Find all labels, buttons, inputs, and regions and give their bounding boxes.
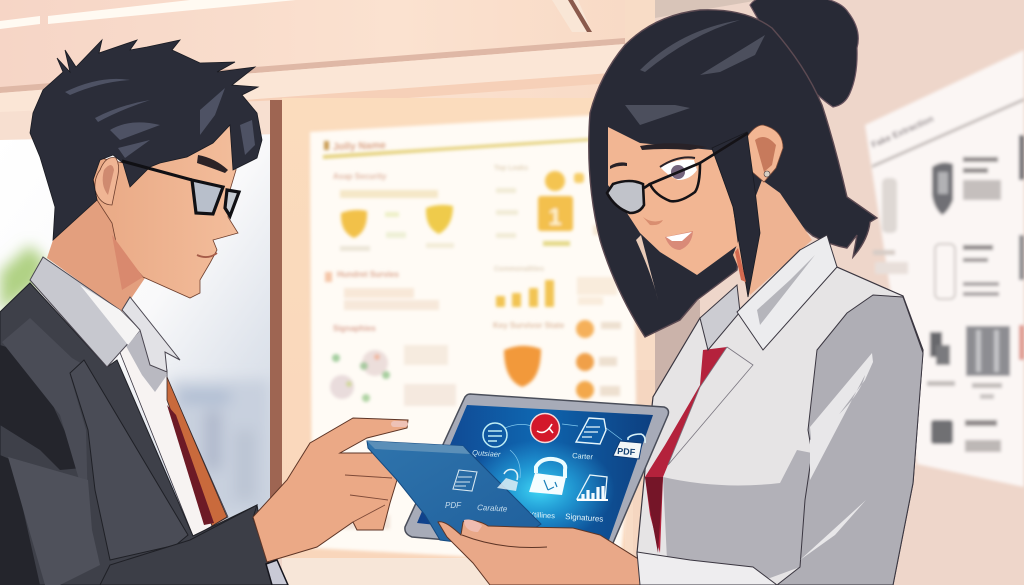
collar light bbox=[80, 285, 140, 345]
tablet bbox=[367, 394, 668, 553]
man ear bbox=[95, 158, 119, 205]
woman eyes bbox=[660, 160, 697, 180]
suit pocket fold bbox=[8, 457, 100, 585]
man hair bbox=[30, 40, 262, 240]
icon: small padlock bbox=[497, 470, 518, 491]
leaf top edge bbox=[367, 441, 470, 454]
collar shade bbox=[757, 255, 815, 325]
woman mouth bbox=[665, 231, 693, 250]
poster left column bbox=[325, 172, 456, 529]
woman nose bbox=[643, 217, 663, 225]
poster left column: Asap Security bbox=[333, 172, 387, 181]
woman blouse bbox=[637, 250, 923, 585]
woman glasses bbox=[607, 133, 748, 213]
icon: padlock badge bbox=[613, 434, 645, 459]
neck shadow bbox=[112, 235, 143, 290]
poster left column: Hundret Survies bbox=[337, 270, 399, 279]
woman teeth bbox=[666, 232, 692, 241]
tablet front leaf bbox=[367, 441, 541, 548]
hair sheen bbox=[65, 79, 255, 158]
man fingernail bbox=[391, 421, 408, 427]
man bbox=[0, 40, 408, 585]
hair light strand bbox=[636, 235, 658, 300]
screen glow bbox=[465, 440, 615, 540]
poster heading bbox=[323, 138, 590, 159]
poster heading: Jolly Name bbox=[333, 140, 386, 153]
window with blurred city view bbox=[0, 100, 282, 520]
tie shade bbox=[645, 477, 663, 553]
poster title: Fake Extraction bbox=[870, 113, 935, 150]
label: Ytillines: Ytillines bbox=[529, 510, 555, 520]
poster right column: 1 bbox=[548, 204, 562, 231]
poster right column: Key Survivor State bbox=[493, 321, 565, 330]
man inner ear bbox=[103, 165, 114, 195]
label: PDF: PDF bbox=[445, 501, 462, 510]
suit lapel bbox=[2, 318, 88, 510]
poster right column: Commonalities bbox=[494, 266, 544, 273]
woman bbox=[607, 20, 923, 585]
man tie shade bbox=[167, 405, 214, 525]
blouse sleeve bbox=[777, 295, 923, 585]
icon: document bbox=[576, 418, 606, 444]
poster right column bbox=[493, 165, 621, 399]
poster right column: Top Leaks bbox=[494, 165, 528, 172]
man suit bbox=[0, 283, 285, 585]
blouse collar right bbox=[737, 235, 837, 350]
woman eyebrows bbox=[610, 143, 707, 169]
shirt collar bbox=[30, 257, 140, 367]
label: Caralute: Caralute bbox=[477, 503, 508, 514]
icon: red seal bbox=[530, 414, 560, 442]
poster left column: Signaphies bbox=[333, 324, 376, 333]
neck shadow bbox=[735, 248, 746, 282]
man tie bbox=[167, 377, 227, 526]
right wall poster bbox=[865, 50, 1024, 487]
inner ear bbox=[755, 137, 776, 172]
woman neck bbox=[733, 180, 812, 295]
woman hair silhouette bbox=[589, 10, 877, 337]
suit sleeve bbox=[100, 505, 285, 585]
shirt cuff bbox=[266, 560, 288, 585]
icon: padlock badge: PDF bbox=[617, 446, 636, 457]
tablet frame bbox=[405, 394, 668, 553]
man mouth bbox=[197, 253, 217, 257]
icon: pdf form bbox=[453, 470, 477, 491]
woman side lock bbox=[712, 132, 760, 297]
woman tie bbox=[645, 347, 727, 553]
sleeve highlights bbox=[800, 353, 873, 560]
woman bun bbox=[750, 0, 858, 107]
blouse collar bbox=[700, 285, 740, 350]
man neck bbox=[47, 195, 145, 312]
label: Signatures: Signatures bbox=[565, 512, 604, 524]
shirt collar right bbox=[122, 297, 180, 372]
background poster board bbox=[310, 113, 636, 565]
icon: bar chart card bbox=[577, 475, 608, 500]
blouse cuff bbox=[637, 552, 777, 585]
finger crease bbox=[462, 535, 547, 548]
man hand bbox=[253, 418, 408, 562]
man shirt bbox=[117, 330, 228, 536]
label: Carter: Carter bbox=[572, 451, 594, 461]
man eyebrow bbox=[197, 155, 228, 173]
tablet screen bbox=[417, 405, 653, 543]
woman face bbox=[608, 127, 738, 275]
icon: chat circle bbox=[483, 423, 507, 447]
woman earring bbox=[764, 171, 770, 177]
blouse lower shade bbox=[663, 450, 812, 578]
label: Qutsiaer: Qutsiaer bbox=[472, 448, 501, 459]
suit front panel bbox=[70, 360, 188, 560]
man face bbox=[93, 122, 238, 298]
icon: central padlock bbox=[529, 459, 566, 495]
finger lines bbox=[345, 475, 392, 522]
man glasses bbox=[122, 161, 239, 216]
woman ear bbox=[747, 125, 783, 182]
blouse lapel bbox=[668, 347, 753, 465]
hair sheen bbox=[625, 20, 765, 125]
man shirt placket shade bbox=[120, 325, 167, 392]
connector lines bbox=[505, 424, 622, 478]
suit dark side bbox=[0, 345, 82, 585]
fingernail bbox=[464, 519, 482, 532]
woman hand bbox=[438, 519, 640, 585]
